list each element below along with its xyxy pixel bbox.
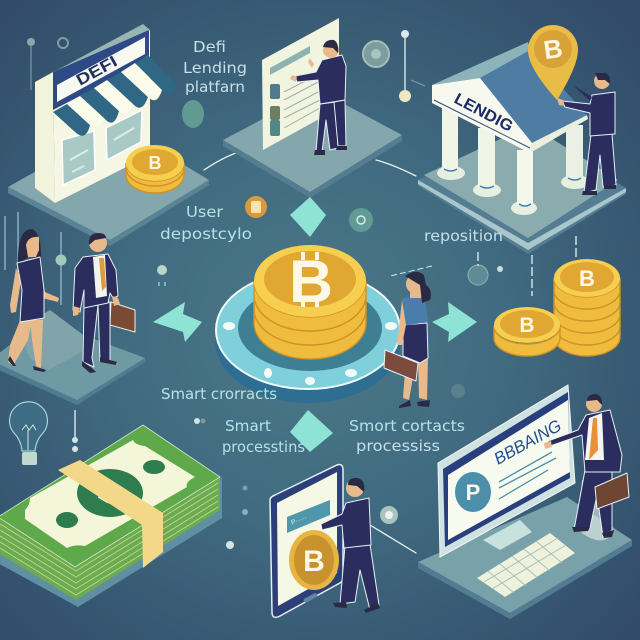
presenter with briefcase figure — [544, 394, 629, 540]
heading: DeFi lending platform — [183, 38, 247, 96]
central gold coin stack — [254, 245, 366, 359]
central gold coin stack: B — [289, 248, 333, 315]
box on platform — [17, 310, 82, 370]
base ring — [215, 270, 401, 403]
coin on store platform: B — [148, 153, 162, 173]
label: smart contracts processing: processiss — [356, 437, 440, 455]
panel: computer and presenter — [418, 385, 632, 619]
label: user deposit: depostcylo — [160, 225, 252, 243]
cash stack sides — [0, 477, 222, 607]
label: user deposit: User — [186, 203, 224, 221]
monitor: P — [466, 480, 480, 505]
document sheet — [262, 18, 339, 150]
arrow: right — [432, 302, 477, 342]
man figure with briefcase — [73, 233, 135, 373]
phone device: B — [303, 545, 325, 578]
woman figure — [8, 229, 59, 372]
label: smart contracts processing: Smort cortacts — [349, 417, 465, 435]
icon: bitcoin location pin: B — [542, 33, 564, 65]
coin on store platform — [126, 145, 184, 193]
bank visitor figure — [557, 73, 616, 195]
couple platform — [0, 320, 145, 405]
phone device — [270, 465, 343, 617]
striped awning — [53, 55, 177, 136]
top banknote: B — [93, 475, 126, 512]
panel: DeFi storefront — [8, 24, 209, 246]
phone user figure — [321, 478, 380, 613]
label: smart processing: processtins — [222, 438, 305, 456]
panel: cash stack — [0, 425, 222, 607]
presenter figure — [290, 40, 347, 155]
store building — [35, 24, 150, 203]
panel: couple with depositor — [0, 229, 145, 405]
small coin stack: B — [519, 314, 535, 337]
label: reposition: reposition — [424, 227, 503, 245]
icon: light bulb — [10, 402, 48, 465]
arrow: top diamond — [290, 197, 326, 237]
keyboard — [477, 533, 575, 597]
store platform — [8, 125, 209, 240]
store sign text: DEFI — [74, 53, 120, 89]
panel: central coin stack on ring — [215, 245, 401, 403]
document platform — [223, 90, 402, 198]
heading: DeFi lending platform: Lending — [183, 59, 247, 77]
label: smart contracts processing — [349, 417, 465, 455]
phone device: P····· — [290, 515, 308, 527]
label: smart processing: Smart — [225, 417, 271, 435]
connector lines and small decorative markers — [5, 30, 576, 553]
tall coin stack: B — [579, 266, 595, 291]
icon: bitcoin location pin — [528, 25, 578, 100]
arrow: bottom diamond — [290, 410, 333, 452]
bank roof and pediment — [432, 42, 588, 153]
monitor heading: BBBAING — [491, 416, 565, 468]
bank sign text: LENDIG — [451, 91, 516, 136]
label: user deposit — [160, 203, 252, 243]
monitor — [438, 385, 575, 557]
arrow: left — [153, 302, 202, 342]
paper band — [58, 460, 163, 568]
panel: contract document and presenter — [223, 18, 402, 198]
panel: lending bank — [418, 25, 626, 254]
panel: phone user — [270, 465, 380, 617]
label: smart contracts: Smart crorracts — [161, 385, 277, 403]
desk platform — [418, 497, 632, 619]
label: smart processing — [222, 417, 305, 456]
bank columns — [437, 108, 589, 215]
woman with briefcase figure — [384, 272, 431, 408]
heading: DeFi lending platform: Defi — [193, 38, 226, 56]
top banknote — [0, 425, 220, 567]
bank platform — [418, 125, 626, 254]
heading: DeFi lending platform: platfarn — [185, 78, 245, 96]
right coin stacks — [494, 259, 620, 356]
